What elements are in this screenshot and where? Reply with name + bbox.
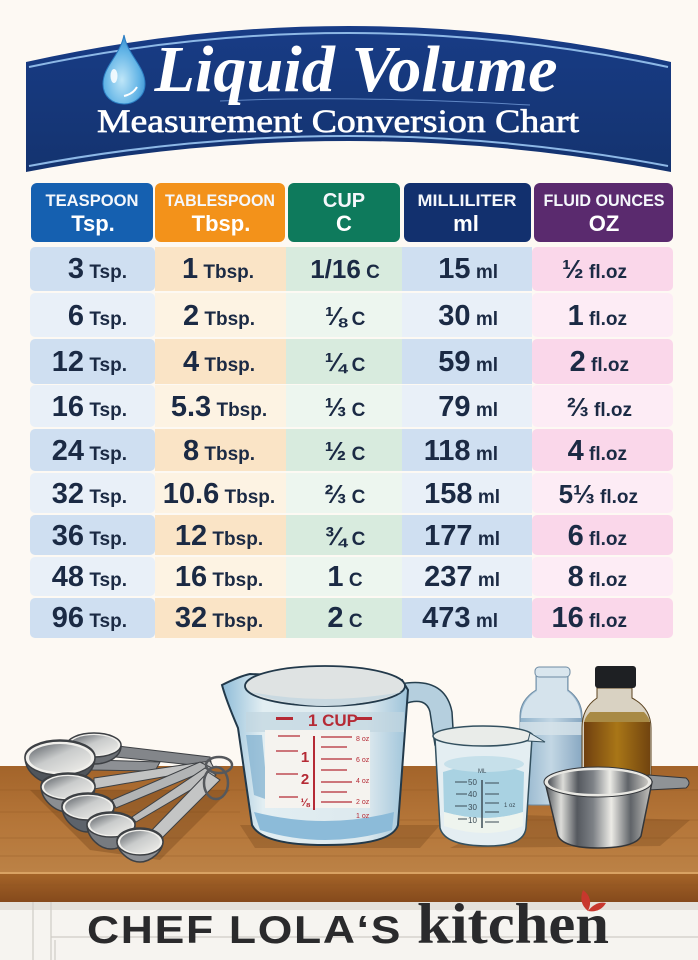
row 8: 8 fl.oz: [568, 561, 627, 593]
amber bottle: [582, 666, 651, 775]
cup markings: 8 oz: [356, 736, 370, 743]
cup markings: 6 oz: [356, 757, 370, 764]
brand: kitchen: kitchen: [417, 893, 609, 956]
row 8: 1 C: [327, 561, 363, 593]
table header row: [31, 183, 673, 242]
row 6: 158 ml: [424, 478, 500, 510]
small beaker: 50: [468, 778, 477, 787]
cup markings: 1 oz: [356, 813, 370, 820]
row 4: 5.3 Tbsp.: [171, 391, 267, 423]
small beaker: 30: [468, 803, 477, 812]
row 3: 12 Tsp.: [52, 346, 127, 378]
cup markings: 4 oz: [356, 778, 370, 785]
row 6: [30, 473, 673, 513]
row 3: [30, 339, 673, 384]
subtitle: Measurement Conversion Chart: Measurement Conversion Chart: [97, 104, 579, 140]
cup markings: 2: [301, 771, 309, 788]
wooden countertop: [0, 766, 698, 902]
cup handle: [400, 683, 454, 745]
row 5: 118 ml: [424, 435, 498, 467]
row 3: 2 fl.oz: [570, 346, 629, 378]
row 4: ⅔ fl.oz: [567, 392, 632, 422]
header: tablespoon: TABLESPOON: [165, 191, 275, 210]
row 8: [30, 557, 673, 596]
row 6: ⅔ C: [325, 479, 366, 509]
row 2: [30, 293, 673, 337]
small beaker: [433, 726, 545, 846]
row 1: ½ fl.oz: [562, 254, 627, 284]
row 5: 4 fl.oz: [568, 435, 627, 467]
spoon rings: [204, 757, 232, 799]
blue bottle: [520, 667, 582, 805]
header: fluid ounces: [534, 183, 673, 242]
row 3: ¼ C: [325, 347, 366, 377]
conversion table: [30, 247, 673, 638]
row 1: 3 Tsp.: [68, 253, 127, 285]
row 2: ⅛ C: [325, 301, 366, 331]
row 6: 10.6 Tbsp.: [163, 478, 275, 510]
header: cup: CUP: [323, 190, 365, 212]
header: tablespoon: [155, 183, 285, 242]
header: cup: [288, 183, 400, 242]
measuring cup: [222, 666, 454, 845]
small beaker: 10: [468, 816, 477, 825]
cup body: [222, 674, 408, 845]
row 3: 4 Tbsp.: [183, 346, 255, 378]
row 4: 79 ml: [438, 391, 498, 423]
row 2: 1 fl.oz: [568, 300, 627, 332]
row 2: 2 Tbsp.: [183, 300, 255, 332]
small beaker: 1 oz: [504, 803, 515, 809]
header: teaspoon: [31, 183, 153, 242]
measuring spoons: [25, 733, 232, 862]
header: teaspoon: TEASPOON: [46, 191, 138, 210]
row 9: 2 C: [327, 602, 363, 634]
row 2: 30 ml: [438, 300, 498, 332]
row 8: 237 ml: [424, 561, 500, 593]
small beaker: 40: [468, 790, 477, 799]
brand: CHEF LOLA'S: CHEF LOLA‘S: [87, 908, 402, 951]
cup markings: 1: [301, 749, 309, 766]
row 4: 16 Tsp.: [52, 391, 127, 423]
row 9: 32 Tbsp.: [175, 602, 263, 634]
cup markings: 1 CUP: [308, 711, 358, 730]
spoon handles: [92, 746, 220, 838]
small beaker: ML: [478, 769, 487, 775]
cup markings: [276, 711, 372, 820]
row 5: [30, 429, 673, 471]
row 5: ½ C: [325, 436, 366, 466]
header: milliliter: ml: [453, 211, 479, 236]
header: cup: C: [336, 211, 352, 236]
row 7: [30, 515, 673, 555]
header: fluid ounces: OZ: [589, 211, 619, 236]
white cabinet: [0, 902, 698, 960]
spoon bowls: [25, 733, 163, 862]
row 1: 1 Tbsp.: [182, 253, 254, 285]
row 7: 36 Tsp.: [52, 520, 127, 552]
title: Liquid Volume: Liquid Volume: [153, 33, 558, 106]
row 9: 16 fl.oz: [551, 602, 627, 634]
row 3: 59 ml: [438, 346, 498, 378]
row 1: [30, 247, 673, 291]
icon: water drop: [103, 35, 145, 104]
row 7: 12 Tbsp.: [175, 520, 263, 552]
row 6: 5⅓ fl.oz: [559, 479, 638, 509]
row 9: 473 ml: [422, 602, 498, 634]
row 5: 24 Tsp.: [52, 435, 127, 467]
steel measuring cup: [544, 767, 689, 848]
row 8: 16 Tbsp.: [175, 561, 263, 593]
row 9: [30, 598, 673, 638]
row 1: 1/16 C: [310, 254, 380, 284]
row 8: 48 Tsp.: [52, 561, 127, 593]
cup markings: 2 oz: [356, 799, 370, 806]
row 2: 6 Tsp.: [68, 300, 127, 332]
row 1: 15 ml: [438, 253, 498, 285]
row 5: 8 Tbsp.: [183, 435, 255, 467]
footer logo: [87, 890, 609, 956]
row 4: ⅓ C: [325, 392, 366, 422]
cup markings: ⅛: [300, 797, 310, 809]
header: milliliter: [404, 183, 531, 242]
row 4: [30, 385, 673, 427]
icon: red leaves: [581, 890, 606, 911]
header: tablespoon: Tbsp.: [192, 211, 250, 236]
header: milliliter: MILLILITER: [418, 191, 516, 210]
row 9: 96 Tsp.: [52, 602, 127, 634]
row 7: ¾ C: [325, 521, 366, 551]
header: teaspoon: Tsp.: [71, 211, 115, 236]
row 7: 6 fl.oz: [568, 520, 627, 552]
row 6: 32 Tsp.: [52, 478, 127, 510]
header: fluid ounces: FLUID OUNCES: [544, 191, 664, 210]
title banner: [26, 26, 671, 172]
row 7: 177 ml: [424, 520, 500, 552]
